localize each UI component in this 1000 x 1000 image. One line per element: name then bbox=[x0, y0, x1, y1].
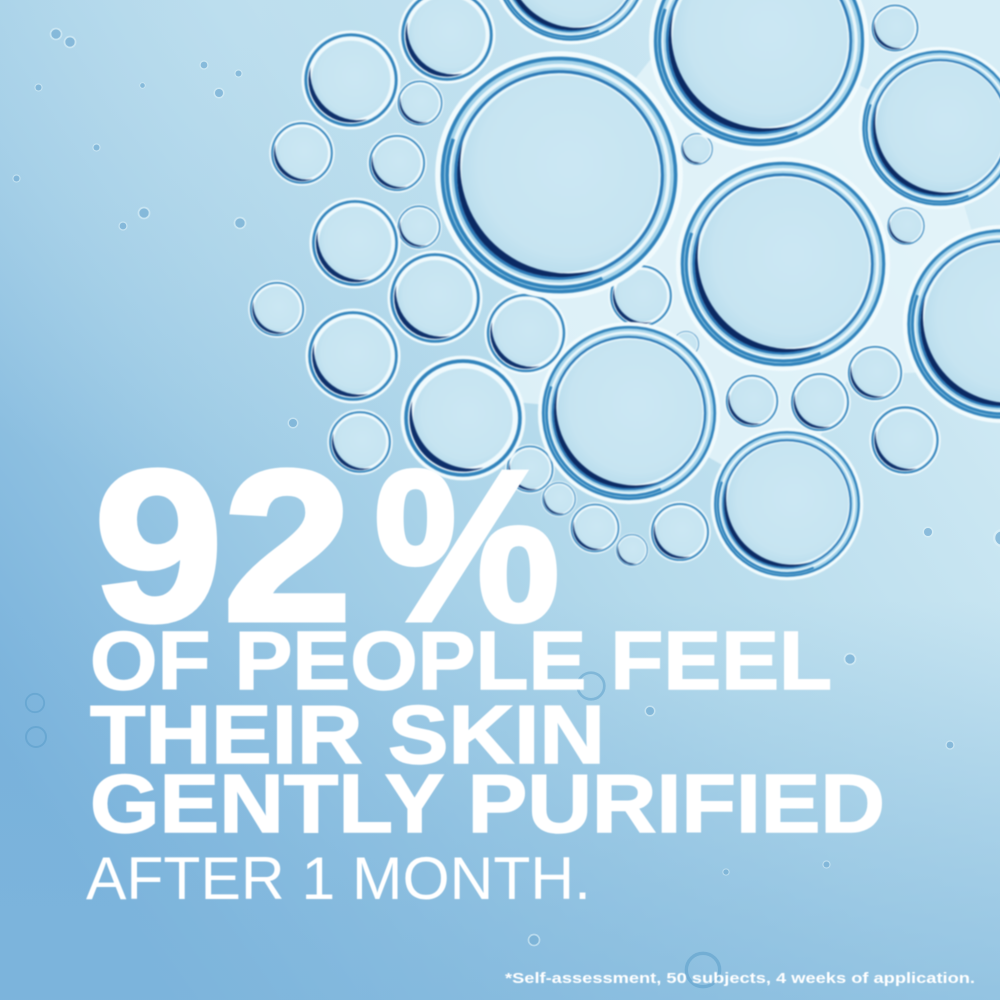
headline: 92%: 92 bbox=[94, 425, 352, 666]
line: their skin: THEIR SKIN bbox=[90, 688, 605, 781]
medium bubbles bbox=[301, 0, 525, 480]
statement bbox=[90, 614, 885, 850]
small bubbles bbox=[248, 3, 941, 567]
line: of people feel: OF PEOPLE FEEL bbox=[90, 614, 832, 707]
headline: 92%: % bbox=[374, 425, 560, 666]
large bubbles bbox=[435, 0, 1000, 580]
bubble cluster bbox=[248, 0, 1000, 580]
headline: 92% bbox=[94, 425, 560, 666]
pale film between large bubbles bbox=[490, 40, 1000, 503]
subheading: AFTER 1 MONTH. bbox=[86, 845, 591, 912]
line: gently purified: GENTLY PURIFIED bbox=[90, 757, 885, 850]
footnote: *Self-assessment, 50 subjects, 4 weeks of application. bbox=[505, 971, 975, 987]
